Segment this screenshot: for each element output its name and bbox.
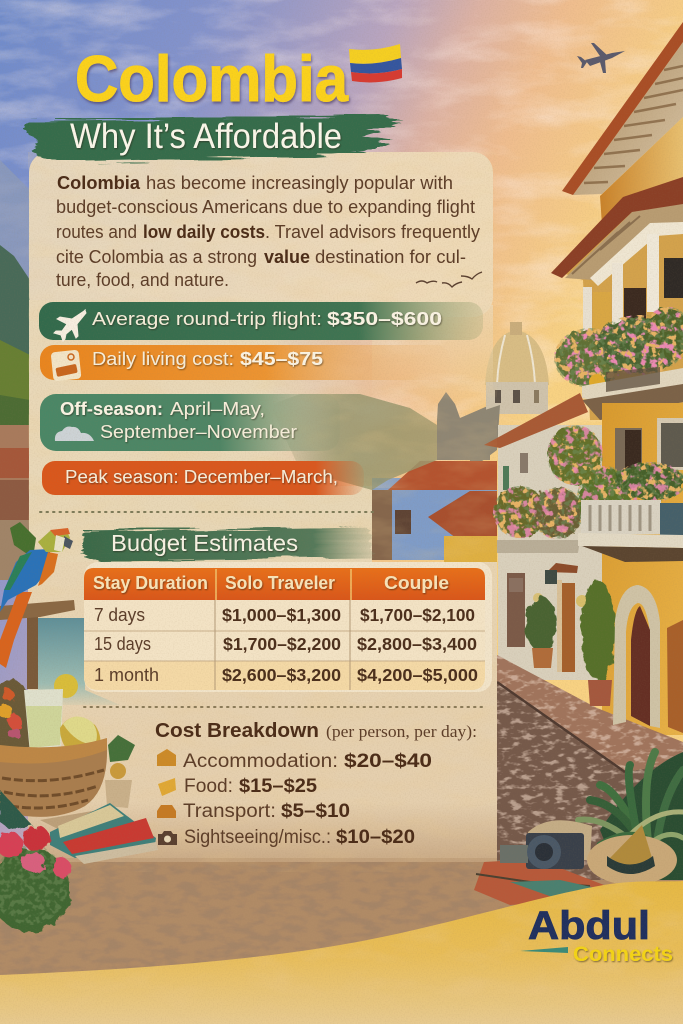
text block: intro paragraph: cite Colombia as a strong [56, 246, 257, 267]
heading: cost breakdown: (per person, per day): [326, 722, 477, 741]
table header [93, 573, 449, 593]
list: cost breakdown: $20–$40 [344, 751, 432, 772]
background: fading sand under card [0, 858, 497, 985]
text block: intro paragraph [56, 172, 481, 290]
building: lower storey [484, 393, 683, 735]
table rows: 7 days [94, 605, 145, 625]
icon: car [157, 805, 176, 818]
paper texture [28, 152, 497, 872]
table rows: 15 days [94, 634, 151, 654]
divider dots [84, 706, 485, 708]
icon: house [157, 749, 176, 766]
panel: upper paper card [29, 152, 493, 566]
bar: peak season [42, 461, 364, 495]
table rows: $1,700–$2,100 [360, 605, 475, 625]
list: cost breakdown: Sightseeing/misc.: [184, 827, 331, 848]
table rows: 1 month [94, 665, 159, 685]
title: Colombia [75, 42, 349, 115]
bar: flight cost [39, 302, 483, 341]
table rows: $1,000–$1,300 [222, 605, 341, 625]
bar: flight cost: Average round-trip flight: [92, 308, 322, 329]
list: cost breakdown [157, 749, 432, 848]
background: mid houses [372, 461, 497, 562]
icon: airplane [54, 310, 86, 341]
icon: Colombian flag [349, 44, 402, 82]
icon: birds [416, 272, 482, 287]
divider dots [40, 511, 378, 513]
text block: intro paragraph: low daily costs [143, 221, 265, 242]
list: cost breakdown: $10–$20 [336, 827, 415, 848]
logo: Abdul Connects: Connects [573, 943, 673, 966]
bar: off-season: Off-season: [60, 398, 163, 419]
heading: cost breakdown: Cost Breakdown [155, 720, 319, 742]
icon: cloud [55, 426, 94, 441]
heading: why it's affordable: Why It’s Affordable [70, 117, 342, 156]
logo: Abdul Connects [520, 904, 673, 966]
building: hanging flowers and lower balcony [490, 425, 683, 562]
panel: lower paper card [28, 562, 497, 862]
text block: intro paragraph: value [264, 246, 310, 267]
icon: food tag [158, 778, 176, 796]
bar: peak season: Peak season: December–March, [65, 466, 338, 487]
list: cost breakdown: Transport: [183, 801, 276, 822]
illustration: foreground flowers and leaves [0, 790, 75, 932]
illustration: camera and books [474, 820, 604, 905]
text block: intro paragraph: Colombia [57, 172, 141, 193]
bar: daily living cost [40, 345, 450, 381]
building: ground floor doors and planters [507, 563, 588, 672]
table rows: $1,700–$2,200 [223, 634, 341, 654]
heading: budget estimates [82, 527, 372, 561]
heading: budget estimates: Budget Estimates [111, 530, 298, 556]
bar: off-season: September–November [100, 421, 297, 442]
table header: Solo Traveler [225, 573, 335, 593]
logo: Abdul Connects: Abdul [528, 904, 650, 948]
text block: intro paragraph: ture, food, and nature. [56, 269, 229, 290]
street [497, 655, 683, 880]
table header: Stay Duration [93, 573, 208, 593]
scene: sea [38, 618, 120, 705]
bar: off-season [40, 394, 340, 451]
text block: intro paragraph: budget-conscious Americans due to expanding flight [56, 196, 475, 217]
table rows: $2,800–$3,400 [357, 634, 477, 654]
text block: intro paragraph: has become increasingly popular with [146, 172, 453, 193]
table: budget estimates [84, 562, 492, 692]
list: cost breakdown: $5–$10 [281, 801, 350, 822]
bar: off-season: April–May, [170, 398, 265, 419]
text block: intro paragraph: destination for cul- [315, 246, 466, 267]
background: distant hill [270, 394, 437, 490]
list: cost breakdown: $15–$25 [239, 776, 317, 797]
table rows: $2,600–$3,200 [222, 665, 341, 685]
building: balcony level [551, 177, 683, 420]
illustration: sun hat [587, 825, 677, 885]
icon: wallet card [51, 350, 81, 381]
footer: yellow wave [0, 880, 683, 1024]
table rows [94, 605, 478, 685]
bar: green title banner [26, 115, 405, 162]
illustration: flowers, drink and basket [0, 674, 135, 830]
list: cost breakdown: Food: [184, 776, 233, 797]
background: church [437, 322, 549, 470]
heading: cost breakdown [155, 720, 477, 742]
bar: daily living cost: Daily living cost: [92, 348, 234, 369]
building: upper roof and wall [562, 22, 683, 225]
illustration: woven rug [50, 803, 158, 864]
text block: intro paragraph: . Travel advisors frequently [265, 221, 481, 242]
list: cost breakdown: Accommodation: [183, 751, 338, 772]
text block: intro paragraph: routes and [56, 221, 137, 242]
building: flowers and upper balcony [550, 305, 683, 420]
background: left mountains and town [0, 160, 30, 580]
ground [0, 850, 683, 1024]
building: planters and arch [525, 580, 683, 733]
icon: camera [158, 831, 177, 845]
illustration: parrot on post [0, 522, 75, 689]
bar: daily living cost: $45–$75 [240, 348, 323, 369]
icon: airplane in sky [577, 43, 625, 73]
table header: Couple [384, 573, 449, 593]
bar: flight cost: $350–$600 [327, 308, 442, 329]
table rows: $4,200–$5,000 [357, 665, 478, 685]
illustration: palm plant [578, 752, 683, 880]
